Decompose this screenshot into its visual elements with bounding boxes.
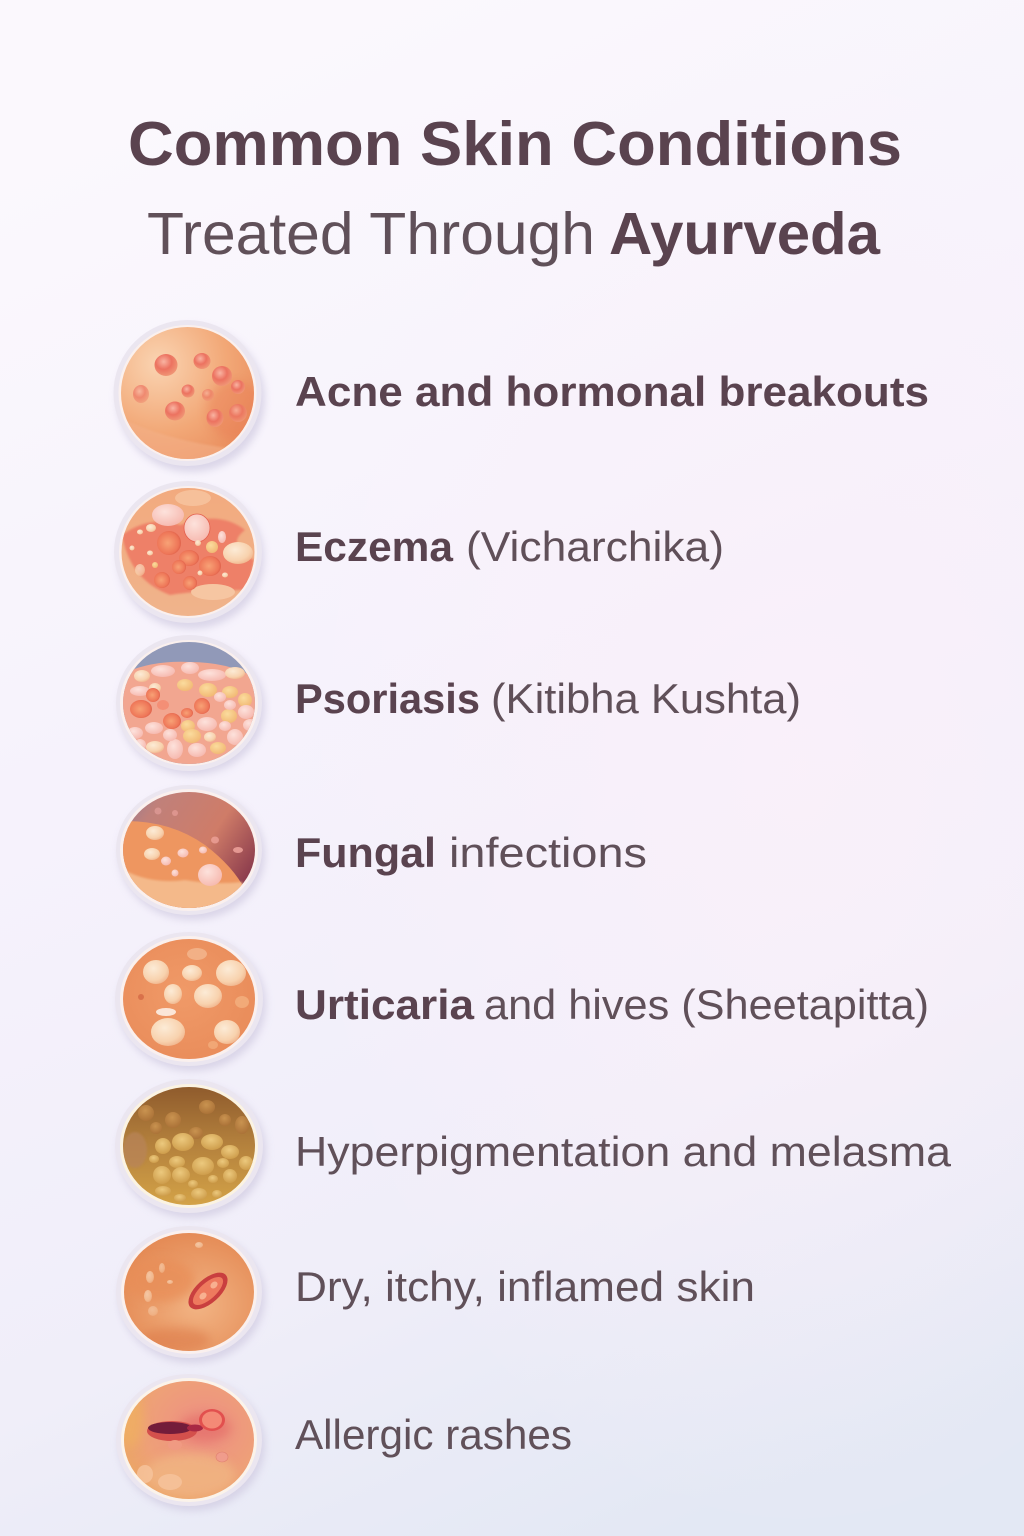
label: eczema: (Vicharchika) [466, 523, 724, 570]
label: psoriasis: (Kitibha Kushta) [491, 675, 801, 722]
icon: acne skin circle [114, 320, 265, 472]
title: Ayurveda [609, 201, 881, 267]
icon: eczema skin circle [114, 481, 264, 629]
label: psoriasis [295, 675, 801, 722]
label: fungal: Fungal [295, 829, 436, 876]
label: eczema [295, 523, 724, 570]
icon: urticaria skin circle [115, 932, 266, 1071]
row: eczema [114, 481, 724, 629]
icon: dry inflamed skin circle [116, 1226, 265, 1363]
label: urticaria [295, 981, 929, 1028]
row: hyperpigmentation [115, 1079, 952, 1218]
label: allergic rashes: Allergic rashes [295, 1411, 572, 1458]
row: dry skin [116, 1226, 755, 1363]
label: fungal [295, 829, 647, 876]
label: psoriasis: Psoriasis [295, 675, 480, 722]
title [128, 110, 902, 267]
label: acne: Acne and hormonal breakouts [295, 368, 929, 415]
label: hyperpigmentation: Hyperpigmentation and melasma [295, 1128, 952, 1175]
label: urticaria: and hives (Sheetapitta) [484, 981, 929, 1028]
row: allergic rashes [116, 1374, 572, 1511]
label: urticaria: Urticaria [295, 981, 475, 1028]
row: urticaria [115, 932, 929, 1071]
icon: allergic rash skin circle [116, 1374, 265, 1511]
row: fungal [116, 785, 647, 920]
icon: fungal skin circle [116, 785, 265, 920]
label: dry skin: Dry, itchy, inflamed skin [295, 1263, 755, 1310]
title: Treated Through [147, 201, 595, 267]
label: eczema: Eczema [295, 523, 454, 570]
row: acne [114, 320, 929, 472]
icon: psoriasis skin circle [116, 635, 265, 775]
label: fungal: infections [449, 829, 647, 876]
title: Common Skin Conditions [128, 110, 902, 179]
row: psoriasis [116, 635, 801, 775]
icon: hyperpigmentation skin circle [115, 1079, 266, 1218]
